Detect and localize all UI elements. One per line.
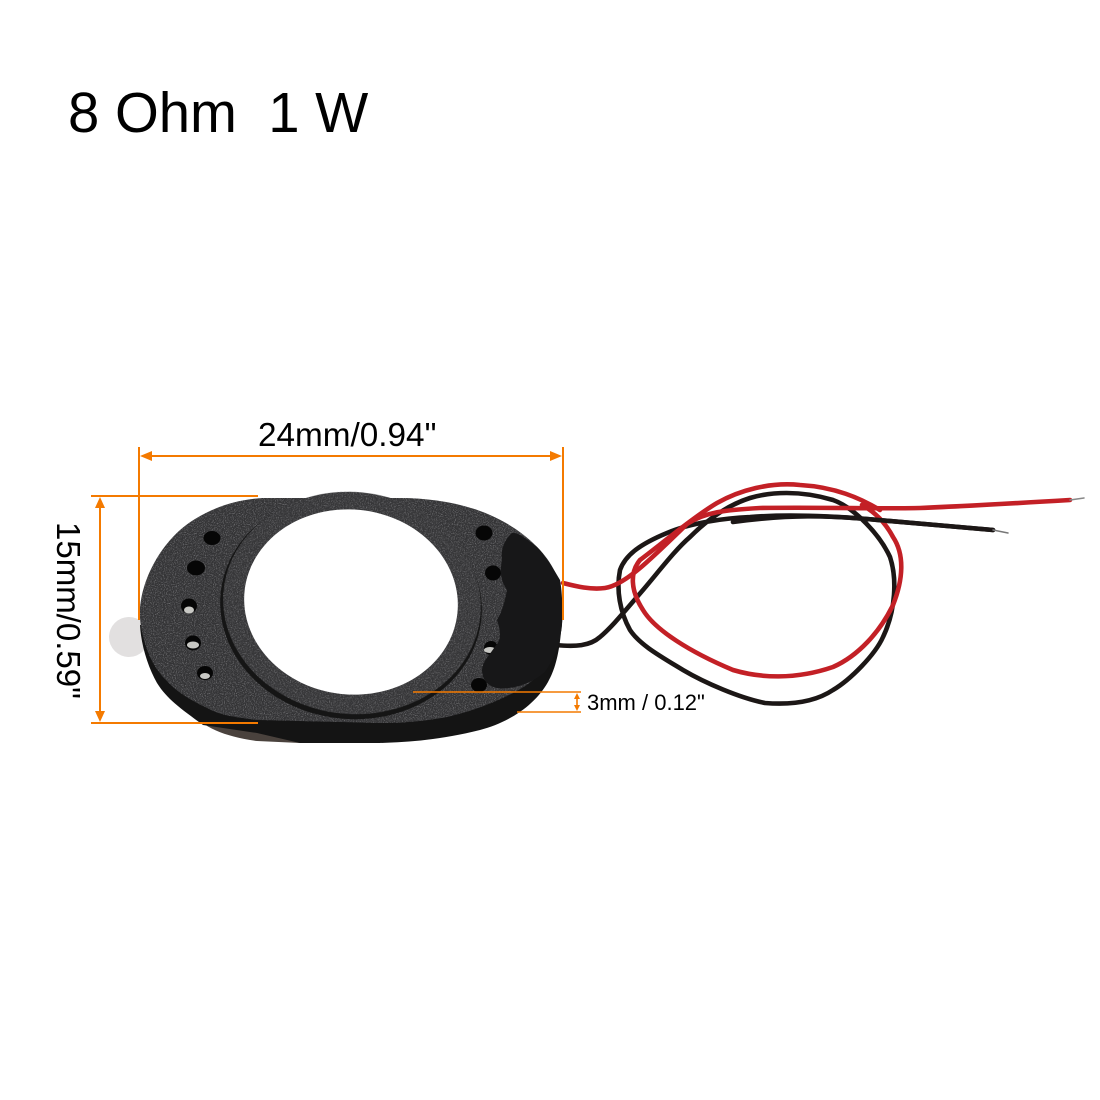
fabric underside [190,712,300,743]
dimension: height 15mm [50,496,258,723]
dimension: width 24mm [139,417,563,620]
speaker side edge [140,600,562,743]
wire tips [993,530,1008,533]
glue blob [482,533,562,688]
mounting plate [140,498,563,723]
dimension: thickness 3mm [413,690,705,715]
dimension: width 24mm: 24mm/0.94" [258,417,436,454]
white speaker opening [235,499,467,705]
wires: red and black leads [556,484,1084,704]
black wire overlap on red [733,516,993,530]
dimension: thickness 3mm: 3mm / 0.12" [587,690,705,715]
black wire loop [556,493,993,704]
adhesive tab [109,617,149,657]
speaker [109,479,563,743]
mesh glints [184,606,496,679]
sound holes [181,526,501,692]
dimension: height 15mm: 15mm/0.59" [50,522,87,699]
front ring shadow [209,480,493,732]
front ring [212,479,492,727]
red wire loop [563,500,1070,589]
title: 8 Ohm 1 W [68,81,368,144]
